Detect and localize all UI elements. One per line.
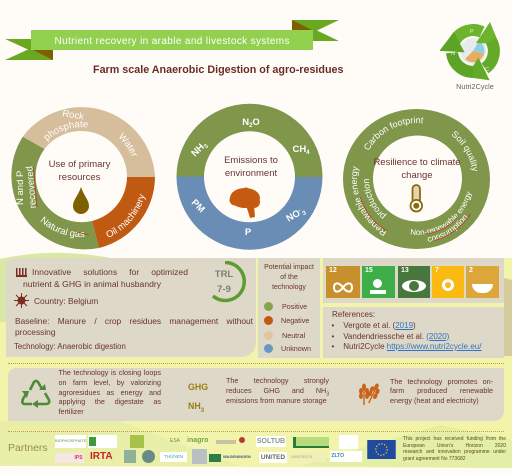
TRL gauge: TRL [215, 269, 233, 280]
title ribbon [5, 20, 339, 60]
legend heading [264, 264, 314, 291]
partner logos [55, 435, 362, 464]
benefit text 3 [390, 376, 493, 405]
icon: SDG 2: 2 [469, 267, 473, 274]
ring 3: resilience to climate change: consumption [428, 215, 468, 242]
panel: potential impact legend [258, 258, 320, 358]
partner logos: inagro [187, 437, 208, 444]
partner logos: SOLTUB [257, 438, 285, 445]
legend: unknown [264, 344, 311, 353]
logo: Nutri2Cycle: N [451, 51, 455, 57]
ring 3: resilience to climate change: Soil quality [452, 131, 478, 171]
ring 1: use of primary resources: Rock [61, 108, 85, 123]
title ribbon: Nutrient recovery in arable and livestock systems [54, 36, 290, 47]
legend heading: Potential impact [264, 264, 314, 271]
funding statement: grant agreement No 773682 [403, 456, 466, 462]
baseline [15, 316, 253, 337]
legend heading: of the [280, 274, 298, 281]
partners heading: Partners [8, 442, 48, 454]
GHG and NH3 labels: GHG [188, 382, 208, 392]
icon: wheat [359, 384, 380, 405]
baseline: processing [15, 327, 56, 337]
ring 2: emissions to environment [176, 104, 322, 250]
country: Country: Belgium [34, 296, 98, 306]
ring 1: use of primary resources [11, 107, 155, 250]
icon: SDG 7 [432, 266, 464, 298]
icon: SDG 12: 12 [329, 267, 337, 274]
technology: Technology: Anaerobic digestion [14, 342, 126, 351]
benefit text 1 [58, 368, 161, 416]
partner logos: ESA [170, 438, 180, 444]
panel: benefits [8, 368, 504, 421]
ring 1: use of primary resources: Natural gas [40, 216, 84, 238]
benefit text 1: The technology is closing loops [58, 368, 161, 377]
funding statement [403, 436, 506, 462]
legend: positive: Positive [282, 302, 307, 310]
panel: references [323, 307, 504, 358]
benefit text 1: agroresidues as energy and [58, 388, 161, 397]
ring 2: emissions to environment: N [242, 117, 249, 128]
ring 2: emissions to environment: 3 [302, 210, 308, 217]
partner logos: WAGENINGEN [223, 454, 251, 459]
benefit text 2: emissions from manure storage [226, 396, 327, 405]
subtitle: Farm scale Anaerobic Digestion of agro-residues [93, 64, 344, 76]
ring 1: use of primary resources: recovered [24, 166, 39, 209]
ring 2: emissions to environment: 2 [249, 123, 253, 129]
ring 1: use of primary resources: N and P [15, 171, 26, 205]
benefit text 3: energy (heat and electricity) [390, 396, 479, 405]
legend: positive [264, 302, 307, 311]
ring 2: emissions to environment: PM [189, 197, 207, 215]
legend: unknown: Unknown [281, 344, 311, 352]
partner logos: UNIVERSITÀ [291, 455, 312, 459]
ring 2: emissions to environment: NH [189, 142, 207, 159]
ring 3: resilience to climate change [343, 109, 490, 249]
logo: Nutri2Cycle: Nutri2Cycle [456, 82, 494, 91]
funding statement: research and innovation programme under [403, 449, 506, 455]
partner logos: THÜNEN [164, 454, 183, 459]
icon: SDG 15: 15 [365, 267, 373, 274]
ring 2: emissions to environment: 3 [203, 143, 210, 150]
TRL gauge [212, 261, 246, 302]
innovative solutions text: nutrient & GHG in animal husbandry [23, 279, 161, 289]
icon: factory [16, 268, 27, 277]
ring 3: resilience to climate change: change [401, 170, 433, 181]
ring 3: resilience to climate change: Non-renewable energy [410, 191, 472, 235]
divider dotted top [8, 363, 504, 364]
divider dotted bottom [8, 430, 504, 432]
ring 2: emissions to environment: environment [225, 168, 277, 179]
benefit text 1: on farm level, by valorizing [58, 378, 161, 387]
ring 1: use of primary resources: Water [120, 132, 137, 156]
baseline: Baseline: Manure / crop residues management without [15, 316, 253, 326]
icon: SDG 15 [362, 266, 395, 298]
icon: country sun [14, 293, 29, 308]
reference list [332, 321, 482, 351]
ring 2: emissions to environment: P [245, 227, 252, 238]
partner logos: IRTA [90, 451, 113, 462]
ring 2: emissions to environment: O [252, 117, 260, 128]
ring 1: use of primary resources: phosphate [44, 121, 88, 142]
benefit text 1: applying the digestate as [58, 397, 161, 406]
panel: SDG icons [323, 258, 504, 303]
logo: Nutri2Cycle [440, 22, 500, 91]
partner logos: ZLTO [331, 453, 344, 459]
benefit text 3: farm produced renewable [390, 386, 493, 395]
icon: SDG 12 [326, 266, 360, 298]
panel: technology description [6, 258, 256, 357]
funding statement: This project has received funding from the [403, 436, 506, 442]
ring 2: emissions to environment: NO [285, 208, 302, 224]
ring 1: use of primary resources: Use of primary [49, 159, 111, 170]
benefit text 2: The technology strongly [226, 376, 329, 385]
ring 3: resilience to climate change: Renewable energy [352, 166, 386, 236]
ring 2: emissions to environment: Emissions to [224, 155, 278, 166]
reference list: • Vergote et al. (2019) [332, 321, 416, 330]
benefit text 3: The technology promotes on- [390, 376, 493, 386]
icon: SDG 13 [398, 266, 430, 298]
icon: SDG 7: 7 [435, 267, 439, 274]
legend: neutral [264, 330, 305, 340]
ring 1: use of primary resources: Oil machinery [106, 194, 146, 237]
ring 3: resilience to climate change: Resilience to climate [373, 157, 461, 168]
ring 2: emissions to environment: CH [292, 144, 306, 155]
benefit text 1: fertilizer [58, 407, 84, 416]
funding statement: European Union's Horizon 2020 [403, 443, 506, 449]
innovative solutions text [23, 267, 188, 289]
GHG and NH3 labels: NH3 [188, 401, 204, 414]
logo: Nutri2Cycle: C [485, 67, 489, 73]
icon: recycling [21, 380, 50, 408]
ring 2: emissions to environment: 4 [306, 150, 310, 156]
legend heading: technology [272, 284, 306, 291]
icon: SDG 13: 13 [401, 267, 409, 274]
benefit text 2: reduces GHG and NH3 [226, 386, 329, 397]
legend: negative: Negative [281, 316, 309, 324]
partner logos: BIOPHOSPHATE [55, 438, 86, 443]
ring 2: emissions to environment: - [297, 208, 302, 214]
benefit text 2 [226, 376, 329, 405]
logo: Nutri2Cycle: P [470, 29, 474, 35]
TRL gauge: 7-9 [217, 284, 231, 295]
ring 3: resilience to climate change: Carbon footprint [364, 116, 424, 150]
ring 1: use of primary resources: resources [59, 172, 101, 183]
references heading: References: [332, 310, 375, 319]
icon: SDG 2 [466, 266, 499, 298]
partner logos: IPS [75, 455, 83, 461]
GHG and NH3 labels [188, 382, 208, 414]
reference list: • Vandendriessche et al. (2020) [332, 332, 449, 340]
reference list: • Nutri2Cycle https://www.nutri2cycle.eu/ [332, 342, 481, 351]
partner logos: UNITED [261, 454, 285, 461]
ring 3: resilience to climate change: production [364, 179, 387, 219]
legend: negative [264, 316, 310, 325]
innovative solutions text: Innovative solutions for optimized [32, 267, 188, 277]
EU flag [367, 440, 396, 459]
legend: neutral: Neutral [282, 330, 305, 340]
